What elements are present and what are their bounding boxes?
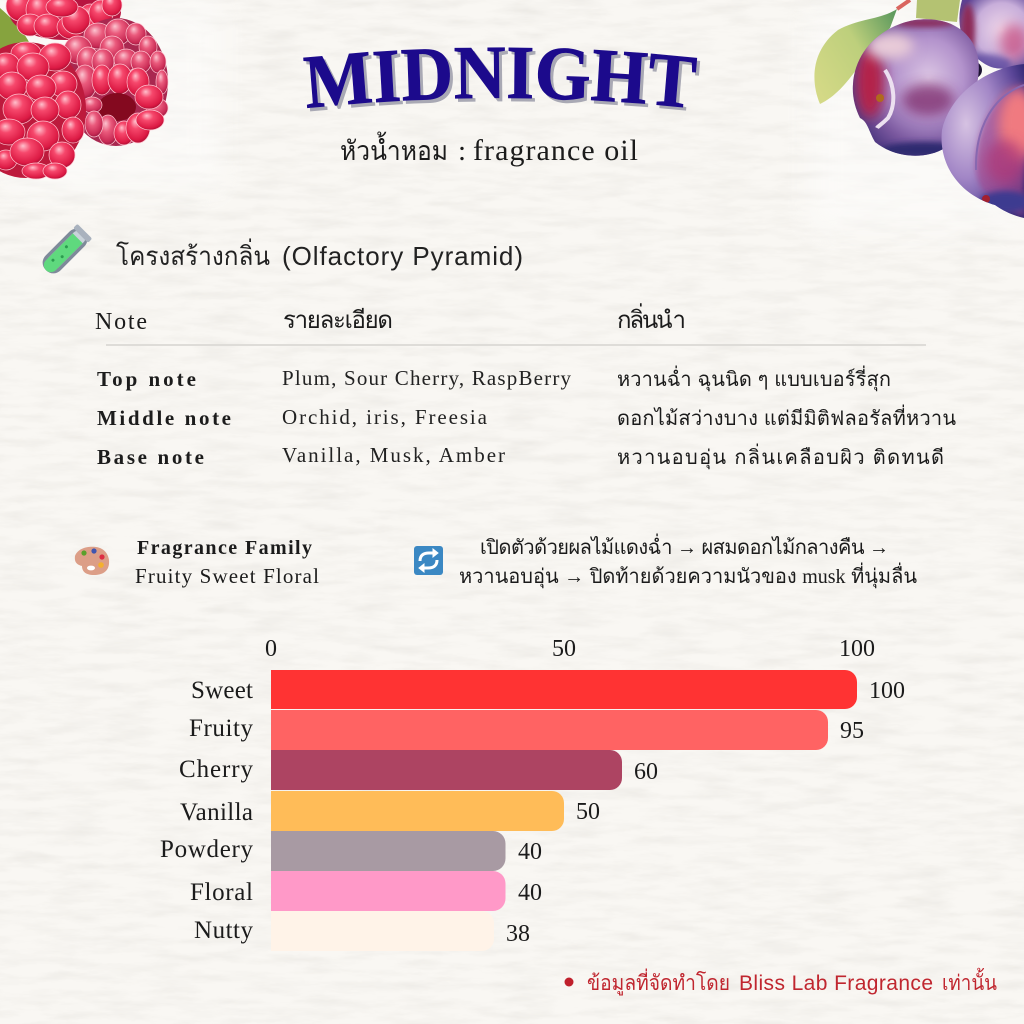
raspberry: left [0, 42, 86, 179]
value labels: 60 [634, 759, 658, 785]
value labels: 40 [518, 880, 542, 906]
fragrance family: Fragrance Family [137, 537, 312, 559]
footer note: เท่านั้น [942, 968, 997, 995]
icon: repeat arrows [414, 546, 443, 575]
section heading: โครงสร้างกลิ่น [116, 238, 270, 271]
row: middle note: Middle note [97, 406, 231, 430]
category labels: Powdery [160, 836, 254, 863]
section heading [116, 238, 523, 271]
category labels: Sweet [191, 677, 253, 704]
category labels: Floral [190, 879, 253, 906]
row: base note: Vanilla, Musk, Amber [282, 443, 505, 467]
plum: bottom right [942, 64, 1024, 218]
bar chart: scent profile [160, 636, 905, 951]
axis labels: 100 [839, 636, 875, 662]
plum: centre [852, 19, 979, 156]
subtitle: : [458, 135, 466, 167]
value labels: 50 [576, 799, 600, 825]
value labels: 38 [506, 921, 530, 947]
scent journey text [459, 533, 917, 589]
subtitle [340, 131, 638, 167]
axis labels [265, 636, 875, 662]
category labels: Cherry [179, 756, 254, 783]
leaf stem [897, 0, 910, 9]
footer note: ข้อมูลที่จัดทำโดย [587, 968, 730, 996]
illustration: plums [814, 0, 1024, 220]
scent journey text: หวานอบอุ่น → ปิดท้ายด้วยความนัวของ musk ที่นุ่มลื่น [459, 562, 917, 589]
title [303, 47, 700, 112]
shadow between plums [962, 61, 982, 79]
table header: รายละเอียด [283, 307, 393, 334]
plum: top right [959, 0, 1024, 69]
icon: test tube [38, 224, 92, 278]
row: middle note: Orchid, iris, Freesia [282, 405, 488, 429]
axis labels: 50 [552, 636, 576, 662]
category labels: Fruity [189, 715, 254, 742]
row: base note: หวานอบอุ่น กลิ่นเคลือบผิว ติดทนดี [617, 443, 944, 470]
table header: Note [95, 309, 147, 335]
leaf behind raspberries [0, 8, 30, 60]
axis labels: 0 [265, 636, 277, 662]
value labels: 100 [869, 678, 905, 704]
footer note [564, 968, 997, 996]
title: MIDNIGHT [303, 47, 698, 108]
row: middle note: ดอกไม้สว่างบาง แต่มีมิติฟลอรัลที่หวาน [617, 404, 956, 430]
category labels: Vanilla [180, 799, 253, 826]
hollow of raspberry [98, 93, 136, 121]
leaf [814, 9, 897, 104]
row: base note: Base note [97, 445, 204, 469]
subtitle: หัวน้ำหอม [340, 131, 448, 166]
raspberry: top [6, 0, 122, 40]
row: top note: Top note [97, 367, 196, 391]
row: top note: หวานฉ่ำ ฉุนนิด ๆ แบบเบอร์รี่สุก [617, 365, 891, 392]
title: MIDNIGHT [306, 50, 700, 112]
icon: palette [75, 547, 109, 575]
leaf behind plums [916, 0, 960, 22]
table header: กลิ่นนำ [617, 303, 686, 334]
section heading: (Olfactory Pyramid) [282, 241, 523, 271]
bars [271, 670, 857, 951]
subtitle: fragrance oil [473, 134, 638, 167]
value labels: 40 [518, 839, 542, 865]
scent journey text: เปิดตัวด้วยผลไม้แดงฉ่ำ → ผสมดอกไม้กลางคืน → [480, 533, 889, 559]
category labels: Nutty [194, 917, 254, 944]
footer note: Bliss Lab Fragrance [739, 972, 933, 995]
category labels [160, 677, 254, 944]
value labels: 95 [840, 718, 864, 744]
illustration: raspberries [0, 0, 168, 179]
fragrance family [135, 537, 319, 588]
row: base note [97, 443, 944, 470]
row: top note [97, 365, 891, 392]
fragrance family: Fruity Sweet Floral [135, 564, 319, 588]
table header [95, 303, 686, 335]
raspberry: right with hollow [64, 18, 168, 146]
value labels [506, 678, 905, 947]
row: middle note [97, 404, 956, 430]
row: top note: Plum, Sour Cherry, RaspBerry [282, 366, 572, 390]
table: olfactory pyramid [95, 303, 956, 470]
